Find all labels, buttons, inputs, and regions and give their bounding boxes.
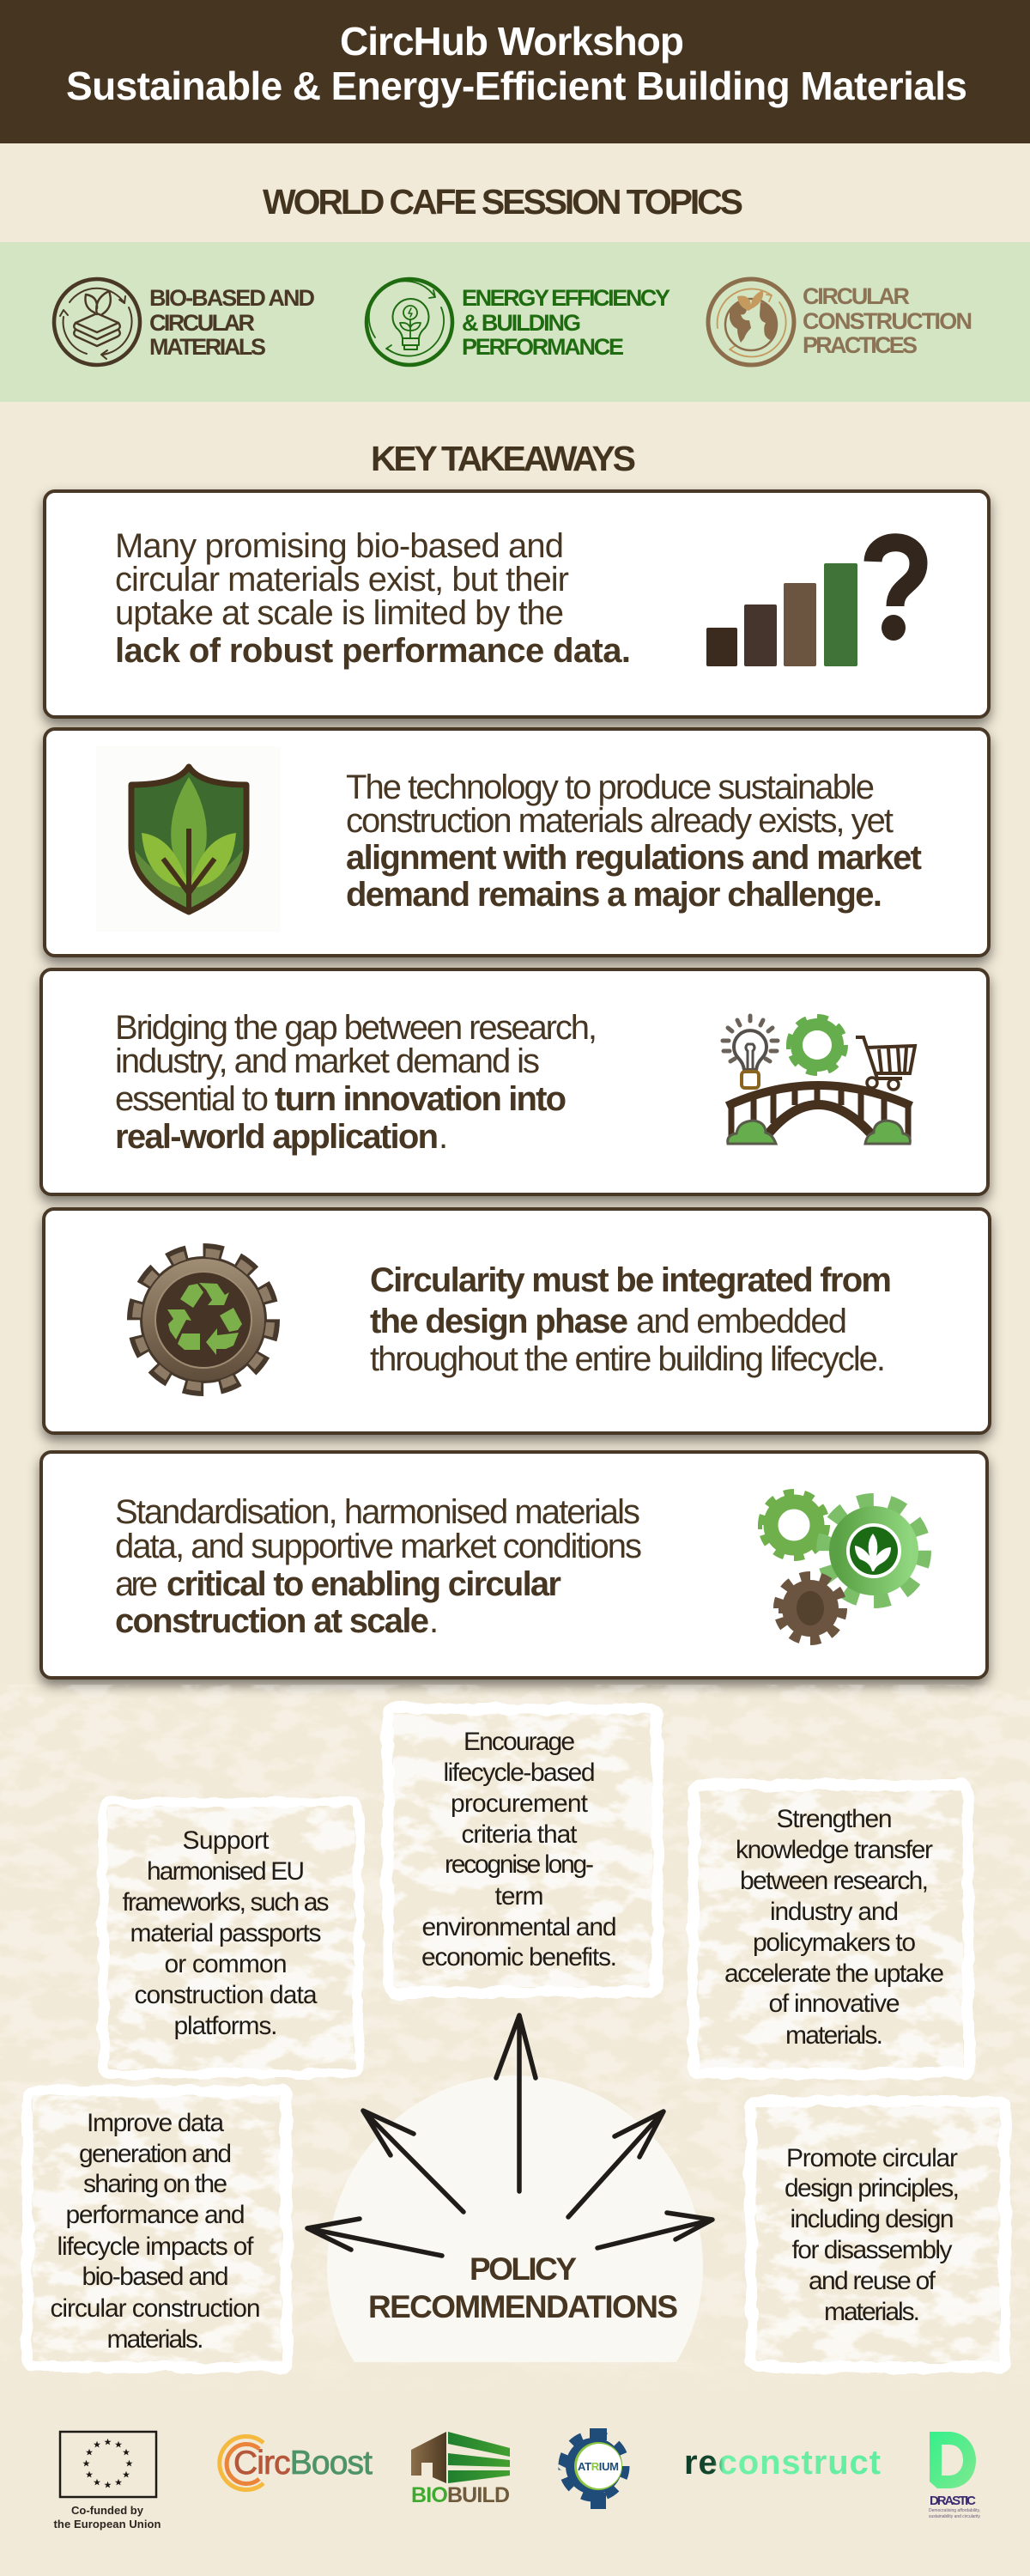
text block bbox=[115, 1009, 597, 1156]
panel: takeaway 3 bbox=[41, 969, 988, 1194]
icon: leaf shield bbox=[96, 746, 281, 932]
logo: co-funded by the European Union: Co-funded by bbox=[71, 2504, 144, 2517]
text block bbox=[115, 1493, 642, 1640]
text block bbox=[50, 2109, 261, 2354]
text block bbox=[370, 1261, 892, 1378]
header banner bbox=[0, 0, 1030, 143]
label: energy efficiency bbox=[462, 285, 670, 360]
arrow: up-right bbox=[568, 2111, 663, 2217]
text block: materials. bbox=[106, 2325, 204, 2354]
panel: harmonised EU frameworks bbox=[103, 1802, 359, 2074]
logo: CircBoost: CircBoost bbox=[233, 2445, 373, 2482]
icon: circular construction bbox=[708, 279, 794, 365]
text block: lack of robust performance data. bbox=[115, 632, 631, 670]
logo: Atrium bbox=[562, 2428, 626, 2509]
text block: frameworks, such as bbox=[122, 1888, 330, 1917]
icon: three gears bbox=[762, 1493, 924, 1640]
icon: bridge with bulb, gear and cart bbox=[723, 1016, 915, 1144]
text block: construction data bbox=[134, 1981, 318, 2009]
text block bbox=[724, 1805, 944, 2050]
panel: takeaway 1 bbox=[45, 491, 989, 717]
text block: are bbox=[115, 1565, 158, 1603]
text block: the design phase bbox=[370, 1303, 628, 1340]
label: bio-based: CIRCULAR bbox=[149, 310, 255, 336]
text block: circular materials exist, but their bbox=[115, 561, 569, 598]
label: energy efficiency: ENERGY EFFICIENCY bbox=[462, 285, 670, 311]
title line 2: Sustainable & Energy-Efficient Building Materials bbox=[66, 64, 967, 108]
text block: construction materials already exists, yet bbox=[346, 802, 894, 840]
background texture: white blotches bbox=[0, 1685, 1030, 2397]
text block: uptake at scale is limited by the bbox=[115, 594, 564, 632]
text block: including design bbox=[790, 2205, 954, 2233]
heading: world cafe session topics: WORLD CAFE SESSION TOPICS bbox=[263, 182, 743, 222]
text block: sharing on the bbox=[83, 2170, 227, 2198]
heading: key takeaways: KEY TAKEAWAYS bbox=[371, 439, 636, 478]
text block: lifecycle-based bbox=[443, 1759, 596, 1787]
text block: industry and bbox=[770, 1898, 899, 1926]
text block: demand remains a major challenge. bbox=[346, 876, 882, 914]
text block: essential to bbox=[115, 1080, 269, 1118]
text block: harmonised EU bbox=[147, 1857, 305, 1886]
text block: generation and bbox=[79, 2140, 232, 2168]
logo: co-funded by the European Union bbox=[53, 2432, 161, 2530]
text block: or common bbox=[165, 1950, 287, 1978]
text block: procurement bbox=[451, 1789, 589, 1818]
heading: policy recommendations bbox=[368, 2251, 678, 2324]
icon: bio-based materials bbox=[54, 279, 140, 365]
panel: circular design principles bbox=[751, 2101, 1005, 2367]
text block: material passports bbox=[130, 1919, 321, 1947]
panel: knowledge transfer bbox=[694, 1785, 968, 2074]
heading: policy recommendations: RECOMMENDATIONS bbox=[368, 2289, 678, 2324]
text block: for disassembly bbox=[791, 2236, 953, 2264]
text block bbox=[421, 1728, 617, 1971]
text block: Improve data bbox=[87, 2109, 224, 2137]
text block: alignment with regulations and market bbox=[346, 839, 922, 877]
text block: data, and supportive market conditions bbox=[115, 1528, 642, 1565]
text block bbox=[785, 2144, 960, 2326]
text block: environmental and bbox=[422, 1913, 616, 1941]
label: bio-based bbox=[149, 285, 315, 360]
logo: DRASTIC bbox=[929, 2432, 980, 2519]
text block: circular construction bbox=[50, 2294, 261, 2323]
logo: DRASTIC: sustainability and circularity bbox=[929, 2514, 980, 2519]
text block: industry, and market demand is bbox=[115, 1042, 540, 1080]
panel: takeaway 5 bbox=[41, 1452, 987, 1678]
text block: between research, bbox=[740, 1867, 929, 1895]
heading: policy recommendations: POLICY bbox=[470, 2251, 577, 2287]
logo: DRASTIC: Democratising affordability, bbox=[929, 2508, 980, 2513]
text block: platforms. bbox=[173, 2012, 278, 2040]
label: circular construction: CONSTRUCTION bbox=[803, 308, 972, 334]
title line 1: CircHub Workshop bbox=[340, 19, 684, 64]
text block: Circularity must be integrated from bbox=[370, 1261, 892, 1299]
logo: co-funded by the European Union: the European Union bbox=[53, 2518, 161, 2530]
text block: of innovative bbox=[769, 1990, 900, 2018]
logo: CircBoost bbox=[220, 2437, 373, 2490]
panel: takeaway 4 bbox=[44, 1209, 990, 1433]
text block: term bbox=[494, 1882, 544, 1911]
text block: bio-based and bbox=[82, 2263, 228, 2291]
text block: policymakers to bbox=[753, 1929, 916, 1957]
logo: Atrium: ATRIUM bbox=[578, 2460, 619, 2473]
text block: throughout the entire building lifecycle. bbox=[370, 1340, 886, 1378]
text block: lifecycle impacts of bbox=[57, 2233, 254, 2261]
text block: materials. bbox=[785, 2021, 883, 2050]
text block: and embedded bbox=[636, 1303, 847, 1340]
text block: real-world application bbox=[115, 1118, 439, 1156]
text block: . bbox=[439, 1118, 448, 1156]
label: circular construction bbox=[803, 283, 972, 358]
logo: reconstruct: reconstruct bbox=[684, 2444, 881, 2482]
text block: materials. bbox=[824, 2298, 920, 2326]
label: circular construction: CIRCULAR bbox=[803, 283, 910, 309]
arrow: left bbox=[307, 2219, 442, 2256]
text block: construction at scale bbox=[115, 1602, 429, 1640]
text block: Standardisation, harmonised materials bbox=[115, 1493, 640, 1531]
text block bbox=[115, 527, 631, 670]
text block: knowledge transfer bbox=[736, 1836, 933, 1864]
text block: The technology to produce sustainable bbox=[346, 769, 875, 806]
text block: Encourage bbox=[464, 1728, 575, 1756]
panel: lifecycle-based procurement bbox=[388, 1709, 657, 1992]
logo: BioBuild bbox=[411, 2432, 510, 2507]
label: energy efficiency: PERFORMANCE bbox=[462, 334, 624, 360]
text block: Promote circular bbox=[786, 2144, 958, 2172]
panel: topics band bbox=[0, 242, 1030, 402]
panel: data generation and sharing bbox=[27, 2091, 287, 2367]
panel: takeaway 2 bbox=[45, 729, 989, 956]
logo: BioBuild: BIOBUILD bbox=[411, 2483, 510, 2507]
text block: Support bbox=[182, 1826, 270, 1855]
text block: accelerate the uptake bbox=[724, 1959, 944, 1988]
text block: turn innovation into bbox=[275, 1080, 566, 1118]
label: circular construction: PRACTICES bbox=[803, 332, 918, 358]
text block bbox=[122, 1826, 330, 2040]
arrow: up bbox=[496, 2015, 536, 2191]
text block: design principles, bbox=[785, 2174, 960, 2202]
text block: critical to enabling circular bbox=[167, 1565, 561, 1603]
text block bbox=[346, 769, 922, 914]
logo: DRASTIC: DRASTIC bbox=[930, 2494, 976, 2508]
label: energy efficiency: & BUILDING bbox=[462, 310, 581, 336]
text block: and reuse of bbox=[809, 2267, 936, 2295]
text block: . bbox=[429, 1602, 439, 1640]
label: bio-based: BIO-BASED AND bbox=[149, 285, 315, 311]
text block: Bridging the gap between research, bbox=[115, 1009, 597, 1047]
arrows from policy recommendations bbox=[307, 2015, 712, 2256]
text block: performance and bbox=[65, 2201, 245, 2229]
text block: Strengthen bbox=[776, 1805, 893, 1833]
label: bio-based: MATERIALS bbox=[149, 334, 266, 360]
text block: economic benefits. bbox=[421, 1943, 617, 1971]
icon: energy efficiency bbox=[367, 279, 452, 365]
central dome bbox=[327, 2075, 703, 2362]
text block: recognise long- bbox=[445, 1850, 594, 1879]
text block: Many promising bio-based and bbox=[115, 527, 564, 565]
icon: bars with question mark bbox=[706, 543, 918, 666]
icon: recycling gear bbox=[135, 1251, 272, 1388]
text block: criteria that bbox=[462, 1820, 578, 1849]
arrow: up-left bbox=[363, 2111, 464, 2212]
arrow: right bbox=[597, 2213, 712, 2248]
